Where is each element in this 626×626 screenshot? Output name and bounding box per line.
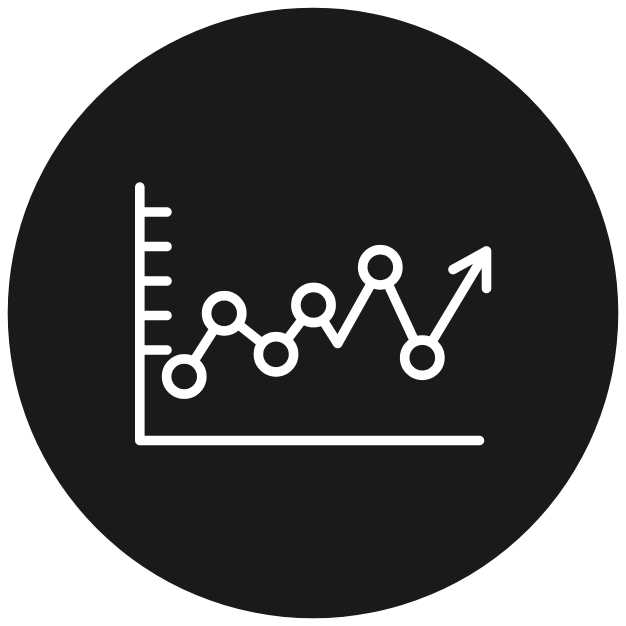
chart: line chart bbox=[140, 187, 487, 440]
axes bbox=[140, 187, 480, 440]
axis tick marks bbox=[140, 212, 167, 350]
icon: arrow head bbox=[453, 251, 486, 288]
trend line bbox=[184, 255, 484, 376]
data points bbox=[167, 250, 440, 394]
